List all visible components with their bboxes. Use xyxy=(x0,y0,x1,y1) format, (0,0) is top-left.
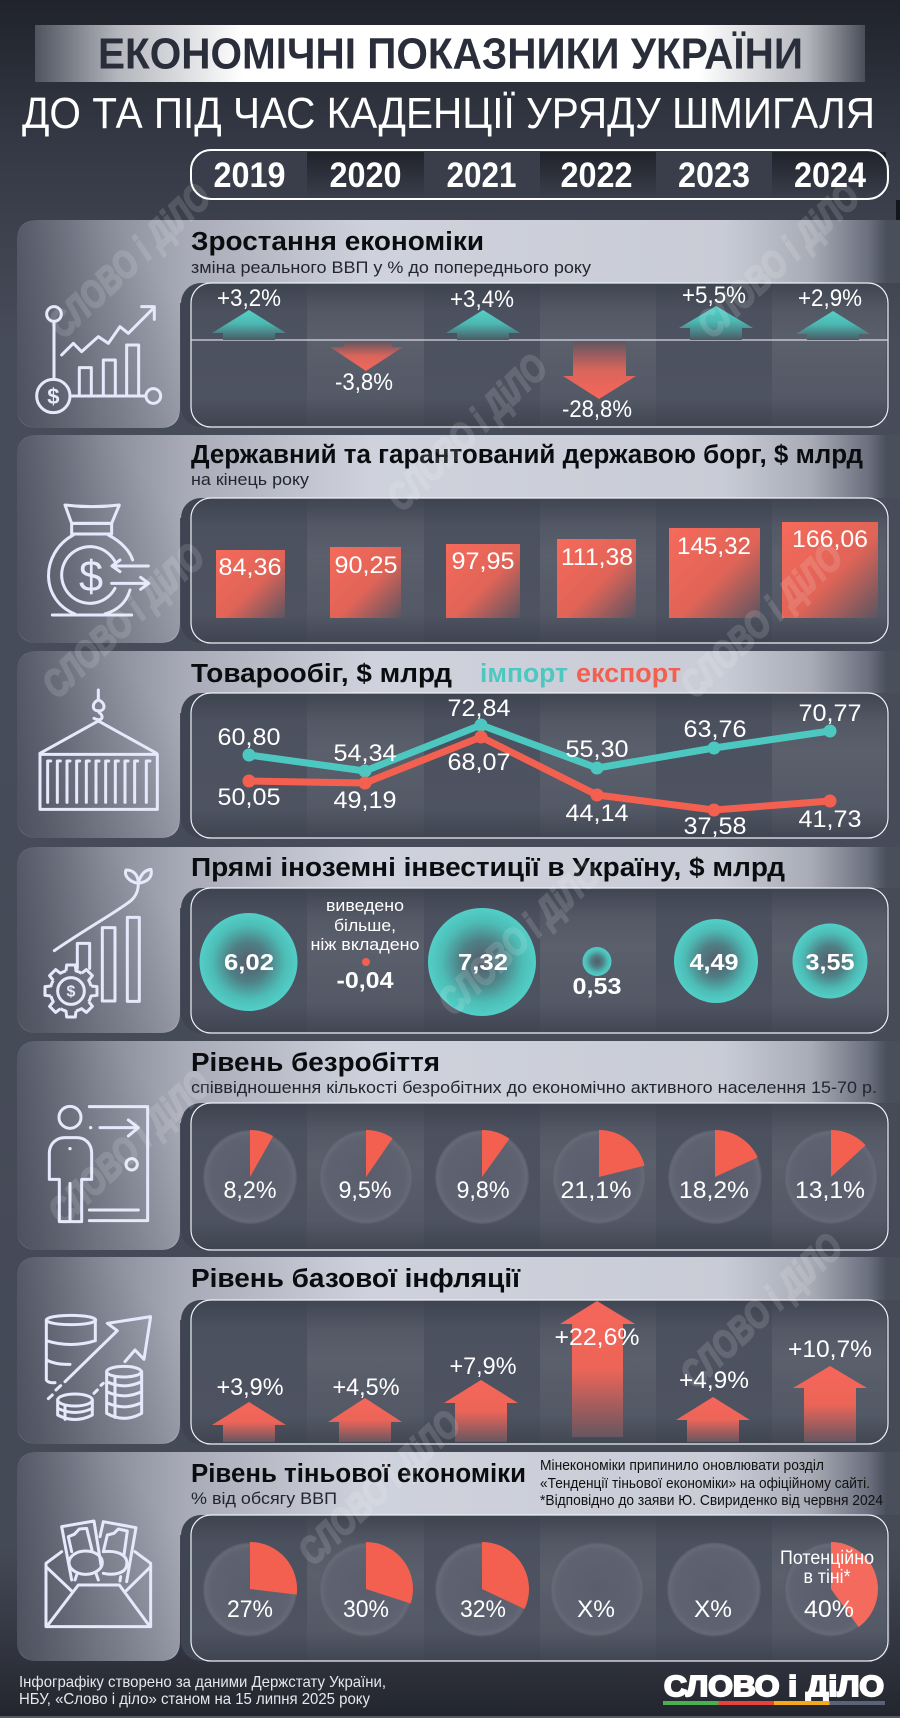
investment values xyxy=(224,949,855,999)
inflation values: +4,5% xyxy=(332,1374,400,1401)
note: withdrawn more than invested: ніж вкладено xyxy=(310,935,420,954)
icon: growth chart xyxy=(37,307,161,413)
investment values: 6,02 xyxy=(224,949,274,975)
panel: state debt xyxy=(17,435,900,643)
panel: shadow economy xyxy=(17,1452,900,1661)
inflation values: +4,9% xyxy=(679,1367,749,1394)
subheading: state debt: на кінець року xyxy=(191,471,310,489)
inflation values: +22,6% xyxy=(554,1324,640,1351)
pie 2019 27% xyxy=(203,1542,297,1636)
pie 2022 21,1% xyxy=(552,1130,646,1224)
heading: economic growth: Зростання економіки xyxy=(191,228,484,256)
arrow up 2019 xyxy=(212,310,286,340)
turnover values: 63,76 xyxy=(684,716,746,743)
growth values: +3,2% xyxy=(217,285,281,312)
bar 2020 xyxy=(330,547,401,618)
bubble 2021 xyxy=(428,908,536,1016)
bubble 2023 xyxy=(674,919,758,1003)
turnover values: 68,07 xyxy=(448,749,510,776)
legend: import: імпорт xyxy=(480,660,568,688)
panel: foreign direct investment xyxy=(17,847,900,1033)
arrow up 2021 xyxy=(444,1380,518,1442)
icon: barrel and coins xyxy=(46,1315,151,1419)
note: withdrawn more than invested xyxy=(310,896,420,954)
note: withdrawn more than invested: більше, xyxy=(334,916,396,935)
line: import xyxy=(242,718,836,778)
note: withdrawn more than invested: виведено xyxy=(326,896,404,915)
watermarks: СЛОВО і ДіЛО xyxy=(672,1226,851,1397)
pie 2024 40% potential: 40% xyxy=(804,1596,854,1623)
bar 2019 xyxy=(216,550,285,618)
debt values: 97,95 xyxy=(452,548,514,575)
pie 2024 40% potential: в тіні* xyxy=(804,1567,851,1588)
turnover values: 60,80 xyxy=(218,724,280,751)
bottom edge xyxy=(0,1716,900,1718)
pie 2021 9,8%: 9,8% xyxy=(456,1177,510,1204)
bar 2023 xyxy=(669,528,760,618)
subheading: unemployment: співвідношення кількості безробітних до економічно активного населення 15-70 р. xyxy=(191,1079,877,1097)
bar 2021 xyxy=(446,544,520,618)
investment values: 7,32 xyxy=(458,949,508,975)
debt values: 111,38 xyxy=(561,544,633,571)
debt values: 84,36 xyxy=(218,554,282,581)
heading: trade turnover: Товарообіг, $ млрд xyxy=(191,660,452,688)
title banner: ЕКОНОМІЧНІ ПОКАЗНИКИ УКРАЇНИ xyxy=(98,30,803,78)
dot 2020 xyxy=(362,958,370,966)
turnover values: 72,84 xyxy=(448,695,510,722)
pie 2024 40% potential xyxy=(780,1542,878,1636)
axis line xyxy=(191,339,888,341)
year header pill: 2024 xyxy=(794,156,866,195)
heading: state debt: Державний та гарантований державою борг, $ млрд xyxy=(191,441,863,469)
pie 2022 21,1%: 21,1% xyxy=(560,1177,632,1204)
inflation values: +3,9% xyxy=(216,1374,284,1401)
legend: export: експорт xyxy=(576,660,681,688)
investment values: 4,49 xyxy=(690,949,738,975)
note: ministry of economy xyxy=(540,1458,883,1509)
icon: person at door xyxy=(49,1106,148,1222)
pie 2019 8,2% xyxy=(203,1130,297,1224)
arrow up 2022 xyxy=(560,1301,635,1437)
arrow down 2022 xyxy=(563,341,636,399)
watermarks: СЛОВО і ДіЛО xyxy=(40,1063,219,1234)
arrow up 2020 xyxy=(328,1398,402,1442)
inflation values xyxy=(216,1324,872,1401)
growth values: +2,9% xyxy=(798,285,862,312)
turnover values xyxy=(218,695,862,840)
arrow up 2023 xyxy=(676,1397,750,1442)
heading: unemployment: Рівень безробіття xyxy=(191,1049,440,1077)
growth values: -3,8% xyxy=(335,369,393,396)
icon: growth chart: $ xyxy=(47,384,59,409)
year header pill: 2022 xyxy=(560,156,632,195)
year header pill xyxy=(191,150,888,199)
arrow down 2020 xyxy=(330,341,403,371)
arrow up 2019 xyxy=(212,1402,286,1442)
pie 2019 8,2%: 8,2% xyxy=(224,1177,276,1204)
icon: investment growth xyxy=(45,869,151,1017)
bubble 2022 xyxy=(582,947,612,976)
turnover values: 49,19 xyxy=(334,787,396,814)
note: ministry of economy: *Відповідно до заяви Ю. Свириденко від червня 2024 xyxy=(540,1493,883,1509)
pie 2024 13,1%: 13,1% xyxy=(795,1177,865,1204)
growth values: +5,5% xyxy=(682,282,746,309)
turnover values: 55,30 xyxy=(566,736,628,763)
investment values: -0,04 xyxy=(336,967,394,993)
panel: core inflation xyxy=(17,1257,900,1444)
debt values: 166,06 xyxy=(792,526,868,553)
watermarks: СЛОВО і ДіЛО xyxy=(34,536,213,707)
heading: foreign direct investment: Прямі іноземні інвестиції в Україну, $ млрд xyxy=(191,854,785,882)
pie 2021 32%: 32% xyxy=(460,1596,506,1623)
icon: envelope with money xyxy=(46,1521,151,1627)
pie 2023 18,2%: 18,2% xyxy=(679,1177,749,1204)
logo: Слово і діло: СЛОВО і ДіЛО xyxy=(664,1671,884,1703)
watermarks: СЛОВО і ДіЛО xyxy=(40,176,219,347)
source note: НБУ, «Слово і діло» станом на 15 липня 2025 року xyxy=(19,1691,370,1708)
pie 2023 18,2% xyxy=(668,1130,762,1224)
line: export xyxy=(242,730,836,816)
pie 2024 40% potential: Потенційно xyxy=(780,1548,874,1569)
heading: core inflation: Рівень базової інфляції xyxy=(191,1265,521,1293)
source note xyxy=(19,1674,386,1708)
note: ministry of economy: «Тенденції тіньової економіки» на офіційному сайті. xyxy=(540,1476,870,1492)
pie 2020 9,5% xyxy=(319,1130,413,1224)
icon: cargo container xyxy=(40,690,157,809)
growth values: +3,4% xyxy=(450,286,514,313)
turnover values: 54,34 xyxy=(334,740,396,767)
bar 2022 xyxy=(557,539,636,618)
watermarks: СЛОВО і ДіЛО xyxy=(290,1403,469,1574)
pie 2022 no data: X% xyxy=(577,1596,615,1623)
year header pill: 2019 xyxy=(214,156,286,195)
pie 2022 no data xyxy=(550,1542,644,1636)
arrow up 2021 xyxy=(446,310,520,340)
pie 2024 13,1% xyxy=(784,1130,878,1224)
panel: unemployment xyxy=(17,1041,900,1250)
turnover values: 37,58 xyxy=(684,813,746,840)
heading: shadow economy: Рівень тіньової економіки xyxy=(191,1460,526,1488)
debt values: 90,25 xyxy=(334,552,398,579)
watermarks: СЛОВО і ДіЛО xyxy=(672,536,851,707)
source note: Інфографіку створено за даними Держстату України, xyxy=(19,1674,386,1691)
year header pill: 2021 xyxy=(446,156,516,195)
inflation values: +10,7% xyxy=(788,1336,872,1363)
pie 2020 30% xyxy=(319,1542,413,1636)
bubble 2024 xyxy=(792,924,868,998)
panel: economic growth xyxy=(17,220,900,428)
panel: trade turnover xyxy=(17,651,900,840)
arrow up 2024 xyxy=(793,1366,867,1442)
inflation values: +7,9% xyxy=(450,1353,516,1380)
debt values xyxy=(218,526,868,581)
icon: money bag: $ xyxy=(79,553,103,601)
growth values xyxy=(217,282,862,423)
arrow up 2024 xyxy=(796,311,870,340)
icon: money bag xyxy=(49,505,149,615)
turnover values: 41,73 xyxy=(798,806,862,833)
year header pill: 2023 xyxy=(678,156,750,195)
pie 2023 no data: X% xyxy=(694,1596,732,1623)
arrow up 2023 xyxy=(679,306,753,340)
pie 2023 no data xyxy=(667,1542,761,1636)
bar 2024 xyxy=(782,522,878,618)
watermarks: СЛОВО і ДіЛО xyxy=(379,347,556,519)
pie 2020 9,5%: 9,5% xyxy=(338,1177,392,1204)
growth values: -28,8% xyxy=(562,396,632,423)
turnover values: 44,14 xyxy=(566,800,628,827)
pie 2020 30%: 30% xyxy=(343,1596,389,1623)
pie 2021 32% xyxy=(435,1542,529,1636)
subheading: economic growth: зміна реального ВВП у % до попереднього року xyxy=(191,259,592,277)
year header pill: 2020 xyxy=(330,156,402,195)
investment values: 0,53 xyxy=(572,973,622,999)
subheading: shadow economy: % від обсягу ВВП xyxy=(191,1490,337,1508)
watermarks xyxy=(34,176,868,1574)
pie 2021 9,8% xyxy=(435,1130,529,1224)
note: ministry of economy: Мінекономіки припинило оновлювати розділ xyxy=(540,1458,824,1474)
icon: investment growth: $ xyxy=(67,984,76,1001)
bubble 2019 xyxy=(200,913,298,1011)
side tick xyxy=(896,200,900,262)
debt values: 145,32 xyxy=(677,533,751,560)
turnover values: 50,05 xyxy=(218,784,280,811)
watermarks: СЛОВО і ДіЛО xyxy=(430,853,609,1024)
investment values: 3,55 xyxy=(806,949,855,975)
pie 2019 27%: 27% xyxy=(227,1596,273,1623)
turnover values: 70,77 xyxy=(798,700,862,727)
